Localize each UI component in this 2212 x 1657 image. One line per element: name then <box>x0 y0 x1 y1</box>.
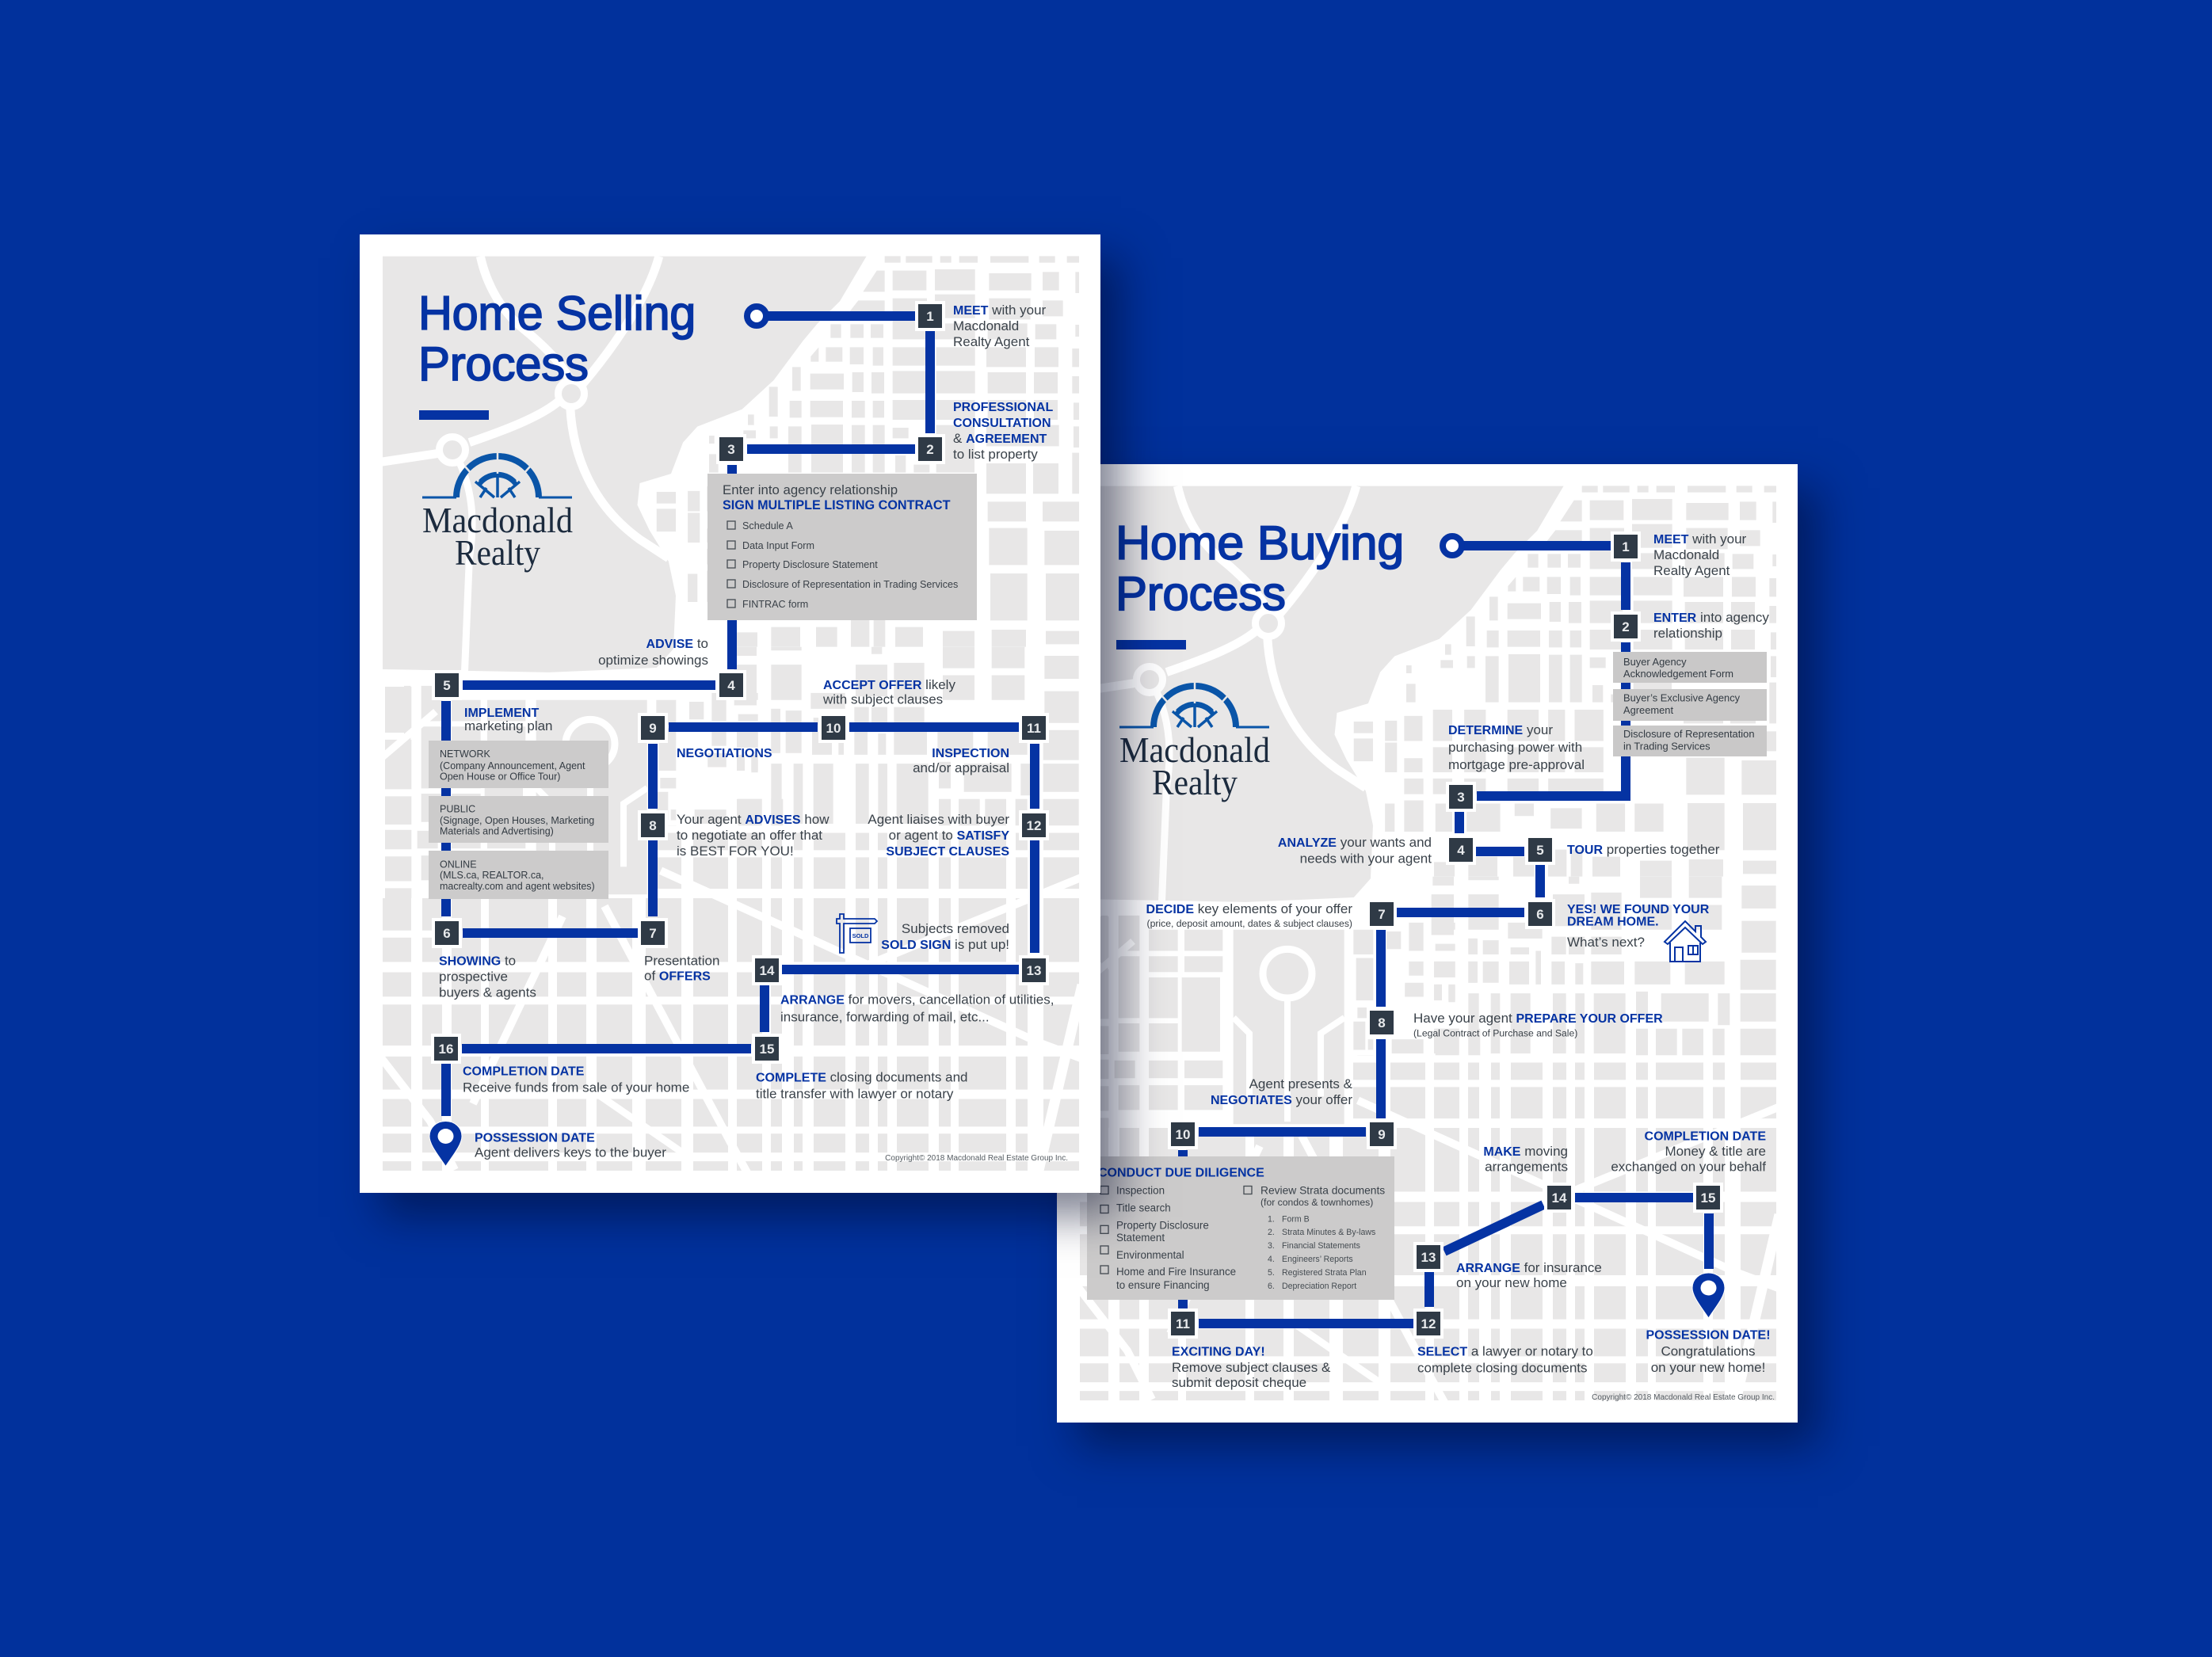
panel: marketing plan boxes: NETWORK <box>440 749 491 760</box>
step 6 text: prospective <box>439 969 508 984</box>
step 7 text: (price, deposit amount, dates & subject clauses) <box>1147 918 1352 929</box>
step nodes 1 to 15: 15 <box>1701 1190 1715 1206</box>
document boxes for step 2: Disclosure of Representation <box>1623 728 1755 740</box>
panel: marketing plan boxes: (Signage, Open Houses, Marketing <box>440 815 594 826</box>
logo: Macdonald Realty <box>1119 683 1270 802</box>
panel: conduct due diligence: Title search <box>1116 1202 1171 1213</box>
step nodes 1 to 15: 11 <box>1176 1316 1190 1331</box>
panel: conduct due diligence: 6. <box>1268 1282 1275 1291</box>
step 6 text <box>1567 903 1710 950</box>
step nodes 1 to 16: 6 <box>443 926 451 941</box>
panel: conduct due diligence: 4. <box>1268 1255 1275 1264</box>
step 7 text <box>1146 901 1352 929</box>
step nodes 1 to 16: 9 <box>649 721 657 736</box>
panel: conduct due diligence: Review Strata documents <box>1260 1185 1385 1196</box>
step nodes 1 to 16: 3 <box>727 442 735 457</box>
icon: house <box>1665 921 1706 962</box>
step 6 text: DREAM HOME. <box>1567 916 1659 928</box>
title: Process <box>418 337 589 390</box>
step 11 text: EXCITING DAY! <box>1172 1345 1265 1358</box>
panel: marketing plan boxes: ONLINE <box>440 859 477 870</box>
step 8 text: to negotiate an offer that <box>677 828 822 843</box>
step nodes 1 to 16: 4 <box>727 678 735 693</box>
panel: conduct due diligence: 2. <box>1268 1228 1275 1237</box>
step nodes 1 to 15: 5 <box>1536 843 1544 858</box>
step 5 text: marketing plan <box>464 718 553 733</box>
step 11 text: submit deposit cheque <box>1172 1375 1306 1390</box>
possession date text: Agent delivers keys to the buyer <box>475 1145 666 1160</box>
icon: sold sign: SOLD <box>852 932 869 939</box>
step nodes 1 to 15: 12 <box>1421 1316 1436 1331</box>
step nodes 1 to 15: 7 <box>1378 907 1386 922</box>
street map background <box>1073 486 1782 1404</box>
step nodes 1 to 16: 11 <box>1027 721 1041 736</box>
panel: listing contract checklist: Schedule A <box>742 520 793 531</box>
step 3 text: DETERMINE your <box>1448 722 1553 737</box>
title accent bar <box>419 410 489 420</box>
step 9 text: Agent presents & <box>1249 1076 1352 1091</box>
title: Home Selling <box>418 287 696 340</box>
panel: conduct due diligence: Form B <box>1282 1214 1310 1224</box>
logo: Macdonald Realty: Macdonald <box>422 500 573 540</box>
step 1 text: Realty Agent <box>953 334 1030 349</box>
step 6 text: SHOWING to <box>439 954 516 968</box>
icon: destination pin <box>1692 1273 1725 1318</box>
step 6 text: buyers & agents <box>439 985 536 1000</box>
panel: conduct due diligence: 1. <box>1268 1214 1275 1224</box>
copyright: Copyright© 2018 Macdonald Real Estate Group Inc. <box>885 1154 1068 1163</box>
step 4 text: needs with your agent <box>1300 851 1432 867</box>
panel: listing contract checklist: Property Disclosure Statement <box>742 559 878 570</box>
step 2 text: AGREEMENT <box>966 432 1047 446</box>
title: Home Buying <box>1116 516 1404 569</box>
logo: Macdonald Realty <box>422 453 573 573</box>
panel: conduct due diligence: Financial Statements <box>1282 1241 1360 1251</box>
step 3 text: purchasing power with <box>1448 740 1582 755</box>
step 7 text: OFFERS <box>659 969 711 984</box>
step 12 text: complete closing documents <box>1417 1360 1588 1375</box>
panel: listing contract checklist: Disclosure of Representation in Trading Services <box>742 579 958 590</box>
step 13 text: on your new home <box>1456 1275 1567 1290</box>
step 5 text: TOUR properties together <box>1567 842 1720 857</box>
step 2 text: relationship <box>1653 626 1722 641</box>
possession date text: Congratulations <box>1661 1343 1756 1358</box>
logo: Macdonald Realty: Macdonald <box>1119 729 1270 770</box>
possession date text: POSSESSION DATE <box>475 1131 595 1145</box>
panel: conduct due diligence: Strata Minutes & By-laws <box>1282 1228 1375 1237</box>
step 2 text: PROFESSIONAL <box>953 401 1053 414</box>
step 13 text: SOLD SIGN is put up! <box>881 937 1009 952</box>
logo: Macdonald Realty: Realty <box>1152 762 1238 802</box>
document boxes for step 2: Buyer’s Exclusive Agency <box>1623 692 1741 703</box>
logo: Macdonald Realty: Realty <box>455 532 540 573</box>
step 4 text: optimize showings <box>598 653 708 668</box>
step 1 text: MEET with your <box>1653 531 1746 547</box>
step nodes 1 to 16: 2 <box>926 442 934 457</box>
document boxes for step 2: Agreement <box>1623 704 1673 716</box>
copyright: Copyright© 2018 Macdonald Real Estate Group Inc. <box>1592 1393 1775 1402</box>
panel: Home Buying Process sheet <box>1057 464 1798 1423</box>
step 2 text: to list property <box>953 447 1038 462</box>
accept offer text: ACCEPT OFFER likely <box>823 677 955 692</box>
step nodes 1 to 16: 5 <box>443 678 451 693</box>
step 15 text: Money & title are <box>1665 1144 1766 1159</box>
step 3 text: mortgage pre-approval <box>1448 757 1585 772</box>
step nodes 1 to 16: 1 <box>926 309 934 324</box>
panel: conduct due diligence: Home and Fire Insurance <box>1116 1266 1236 1278</box>
panel: marketing plan boxes: PUBLIC <box>440 804 475 815</box>
step nodes 1 to 15: 3 <box>1457 790 1465 805</box>
step nodes 1 to 16: 12 <box>1027 818 1041 833</box>
step nodes 1 to 15: 13 <box>1421 1250 1436 1265</box>
panel: conduct due diligence: Environmental <box>1116 1249 1184 1261</box>
step nodes 1 to 15: 4 <box>1457 843 1465 858</box>
icon: sold sign <box>837 914 877 953</box>
step nodes 1 to 15: 8 <box>1378 1015 1386 1030</box>
step 1 text: Macdonald <box>953 318 1019 333</box>
step 8 text: Your agent ADVISES how <box>677 812 830 827</box>
panel: Home Selling Process sheet <box>360 234 1100 1193</box>
step 5 text: IMPLEMENT <box>464 707 539 720</box>
panel: listing contract checklist: Data Input Form <box>742 540 814 551</box>
step nodes 1 to 15: 14 <box>1552 1190 1567 1206</box>
start marker <box>1443 536 1462 555</box>
possession date text: POSSESSION DATE! <box>1646 1328 1771 1342</box>
step 14 text: arrangements <box>1485 1159 1568 1174</box>
step nodes 1 to 15: 1 <box>1622 539 1630 554</box>
document boxes for step 2 <box>1613 652 1767 756</box>
panel: conduct due diligence <box>1087 1156 1394 1300</box>
panel: marketing plan boxes: Materials and Advertising) <box>440 825 554 836</box>
panel: conduct due diligence: (for condos & townhomes) <box>1260 1197 1373 1208</box>
step 15 text: title transfer with lawyer or notary <box>756 1087 954 1102</box>
panel: conduct due diligence: Property Disclosure <box>1116 1219 1209 1231</box>
step 8 text: Have your agent PREPARE YOUR OFFER <box>1413 1011 1663 1026</box>
step 2 text: ENTER into agency <box>1653 610 1769 625</box>
panel: conduct due diligence: Depreciation Report <box>1282 1282 1356 1291</box>
panel: listing contract checklist: SIGN MULTIPLE LISTING CONTRACT <box>723 498 951 512</box>
step nodes 1 to 16: 16 <box>439 1042 453 1057</box>
document boxes for step 2: Acknowledgement Form <box>1623 668 1733 680</box>
panel: conduct due diligence: 3. <box>1268 1241 1275 1251</box>
possession date text: on your new home! <box>1651 1360 1765 1375</box>
step 12 text: Agent liaises with buyer <box>868 812 1009 827</box>
panel: conduct due diligence: Registered Strata Plan <box>1282 1268 1367 1278</box>
step 4 text: ADVISE to <box>646 636 708 651</box>
route line <box>446 316 1035 1116</box>
panel: conduct due diligence: Inspection <box>1116 1185 1165 1196</box>
step 11 text: and/or appraisal <box>913 760 1009 775</box>
document boxes for step 2: in Trading Services <box>1623 740 1710 752</box>
step 8 text <box>1413 1011 1663 1039</box>
step nodes 1 to 15: 6 <box>1536 907 1544 922</box>
step 14 text: ARRANGE for movers, cancellation of utilities, <box>780 992 1054 1007</box>
step 16 text: COMPLETION DATE <box>463 1065 585 1079</box>
step nodes 1 to 15: 9 <box>1378 1127 1386 1142</box>
step 7 text: Presentation <box>644 954 719 968</box>
panel: listing contract checklist <box>707 474 977 620</box>
step nodes 1 to 16: 10 <box>826 721 841 736</box>
route line <box>1183 546 1709 1324</box>
step 1 text: Realty Agent <box>1653 563 1730 578</box>
step 9 text: NEGOTIATES your offer <box>1211 1092 1352 1107</box>
street map background <box>376 256 1085 1174</box>
title: Process <box>1116 567 1286 620</box>
step 12 text: SUBJECT CLAUSES <box>886 845 1009 859</box>
step 11 text: Remove subject clauses & <box>1172 1360 1331 1375</box>
panel: marketing plan boxes: Open House or Office Tour) <box>440 771 560 783</box>
step 2 text: CONSULTATION <box>953 417 1051 430</box>
step 12 text: or agent to SATISFY <box>889 828 1009 843</box>
step 8 text: (Legal Contract of Purchase and Sale) <box>1413 1028 1577 1039</box>
step 13 text: ARRANGE for insurance <box>1456 1260 1602 1275</box>
step 15 text: exchanged on your behalf <box>1611 1159 1766 1174</box>
panel: marketing plan boxes: (Company Announcement, Agent <box>440 760 585 771</box>
start marker <box>747 307 766 326</box>
panel: listing contract checklist: Enter into agency relationship <box>723 482 898 497</box>
step 6 text: What’s next? <box>1567 935 1645 950</box>
step 7 text: of <box>644 968 659 984</box>
step 13 text: Subjects removed <box>902 921 1009 936</box>
step 6 text: YES! WE FOUND YOUR <box>1567 903 1710 916</box>
step 14 text: MAKE moving <box>1483 1144 1568 1159</box>
panel: marketing plan boxes <box>429 741 608 899</box>
step 15 text: COMPLETE closing documents and <box>756 1070 968 1085</box>
panel: marketing plan boxes: (MLS.ca, REALTOR.ca, <box>440 870 544 881</box>
step 7 text: DECIDE key elements of your offer <box>1146 901 1352 916</box>
step 12 text: SELECT a lawyer or notary to <box>1417 1343 1593 1358</box>
title <box>418 287 696 390</box>
accept offer text: with subject clauses <box>822 692 943 707</box>
title <box>1116 516 1404 620</box>
step 8 text: is BEST FOR YOU! <box>677 844 794 859</box>
step nodes 1 to 16: 8 <box>649 818 657 833</box>
panel: conduct due diligence: CONDUCT DUE DILIGENCE <box>1098 1167 1264 1180</box>
panel: conduct due diligence: Statement <box>1116 1232 1165 1244</box>
step nodes 1 to 16: 13 <box>1027 963 1041 978</box>
step nodes 1 to 15: 2 <box>1622 619 1630 634</box>
title accent bar <box>1116 640 1186 649</box>
step 14 text: insurance, forwarding of mail, etc... <box>780 1009 990 1024</box>
step 9 text: NEGOTIATIONS <box>677 747 772 760</box>
step nodes 1 to 16: 7 <box>649 926 657 941</box>
panel: conduct due diligence: 5. <box>1268 1268 1275 1278</box>
step 2 text: & <box>953 431 966 446</box>
step nodes 1 to 16: 15 <box>760 1042 774 1057</box>
step 1 text: MEET with your <box>953 303 1046 318</box>
step nodes 1 to 15 <box>1168 531 1723 1339</box>
panel: conduct due diligence: Engineers’ Reports <box>1282 1255 1353 1264</box>
step nodes 1 to 16 <box>431 301 1049 1064</box>
icon: destination pin <box>429 1122 462 1166</box>
document boxes for step 2: Buyer Agency <box>1623 656 1687 668</box>
step 15 text: COMPLETION DATE <box>1645 1129 1766 1143</box>
step 4 text: ANALYZE your wants and <box>1278 835 1432 850</box>
panel: conduct due diligence: to ensure Financing <box>1116 1279 1210 1291</box>
panel: marketing plan boxes: macrealty.com and agent websites) <box>440 881 595 892</box>
panel: listing contract checklist: FINTRAC form <box>742 599 808 610</box>
step nodes 1 to 16: 14 <box>760 963 775 978</box>
step nodes 1 to 15: 10 <box>1176 1127 1190 1142</box>
step 1 text: Macdonald <box>1653 547 1719 562</box>
step 11 text: INSPECTION <box>932 747 1009 760</box>
step 16 text: Receive funds from sale of your home <box>463 1080 689 1095</box>
